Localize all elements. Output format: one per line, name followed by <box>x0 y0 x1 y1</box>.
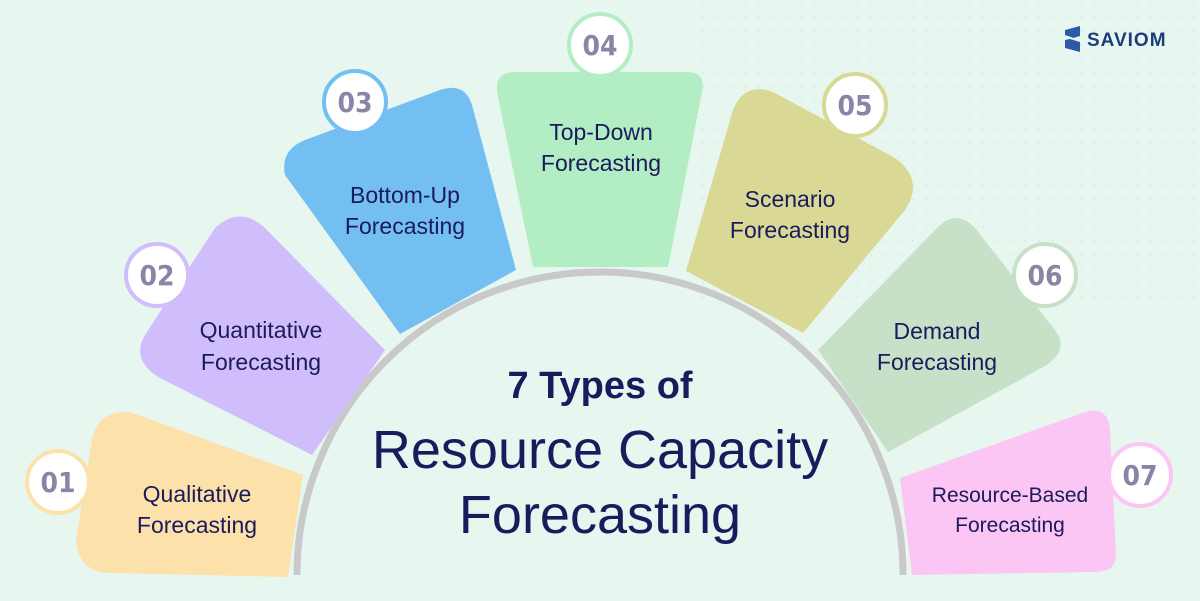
petal 06: Demand <box>894 318 980 344</box>
petal 02: Quantitative <box>200 317 322 343</box>
title <box>372 365 828 545</box>
petal 07: Resource-Based <box>932 484 1088 507</box>
petal 06: Forecasting <box>877 349 997 375</box>
petal 04 <box>497 14 703 267</box>
petal 03 <box>284 71 516 334</box>
petal 05 <box>686 74 913 333</box>
petal 05: 05 <box>837 89 873 122</box>
petal 03: 03 <box>337 86 373 119</box>
petal 01 <box>27 412 303 577</box>
title: 7 Types of <box>507 365 693 407</box>
petal 01: 01 <box>40 466 76 499</box>
logo: SAVIOM <box>1087 30 1167 51</box>
petal 01: Forecasting <box>137 512 257 538</box>
petal 07: 07 <box>1122 459 1158 492</box>
petal 02 <box>126 216 385 455</box>
petal 02: Forecasting <box>201 349 321 375</box>
petal 07: Forecasting <box>955 514 1065 537</box>
petal 07 <box>900 410 1171 575</box>
petal 06 <box>818 218 1076 452</box>
title: Resource Capacity <box>372 420 828 480</box>
petal 01: Qualitative <box>143 481 251 507</box>
petal 04: Forecasting <box>541 150 661 176</box>
petal 05: Scenario <box>745 186 835 212</box>
petal 03: Bottom-Up <box>350 182 460 208</box>
petal 05: Forecasting <box>730 217 850 243</box>
petal 03: Forecasting <box>345 213 465 239</box>
petal 04: 04 <box>582 29 618 62</box>
center arc <box>297 272 903 575</box>
title: Forecasting <box>459 485 741 545</box>
logo <box>1065 26 1167 52</box>
petal 04: Top-Down <box>549 119 653 145</box>
petal 02: 02 <box>139 259 175 292</box>
petal 06: 06 <box>1027 259 1063 292</box>
